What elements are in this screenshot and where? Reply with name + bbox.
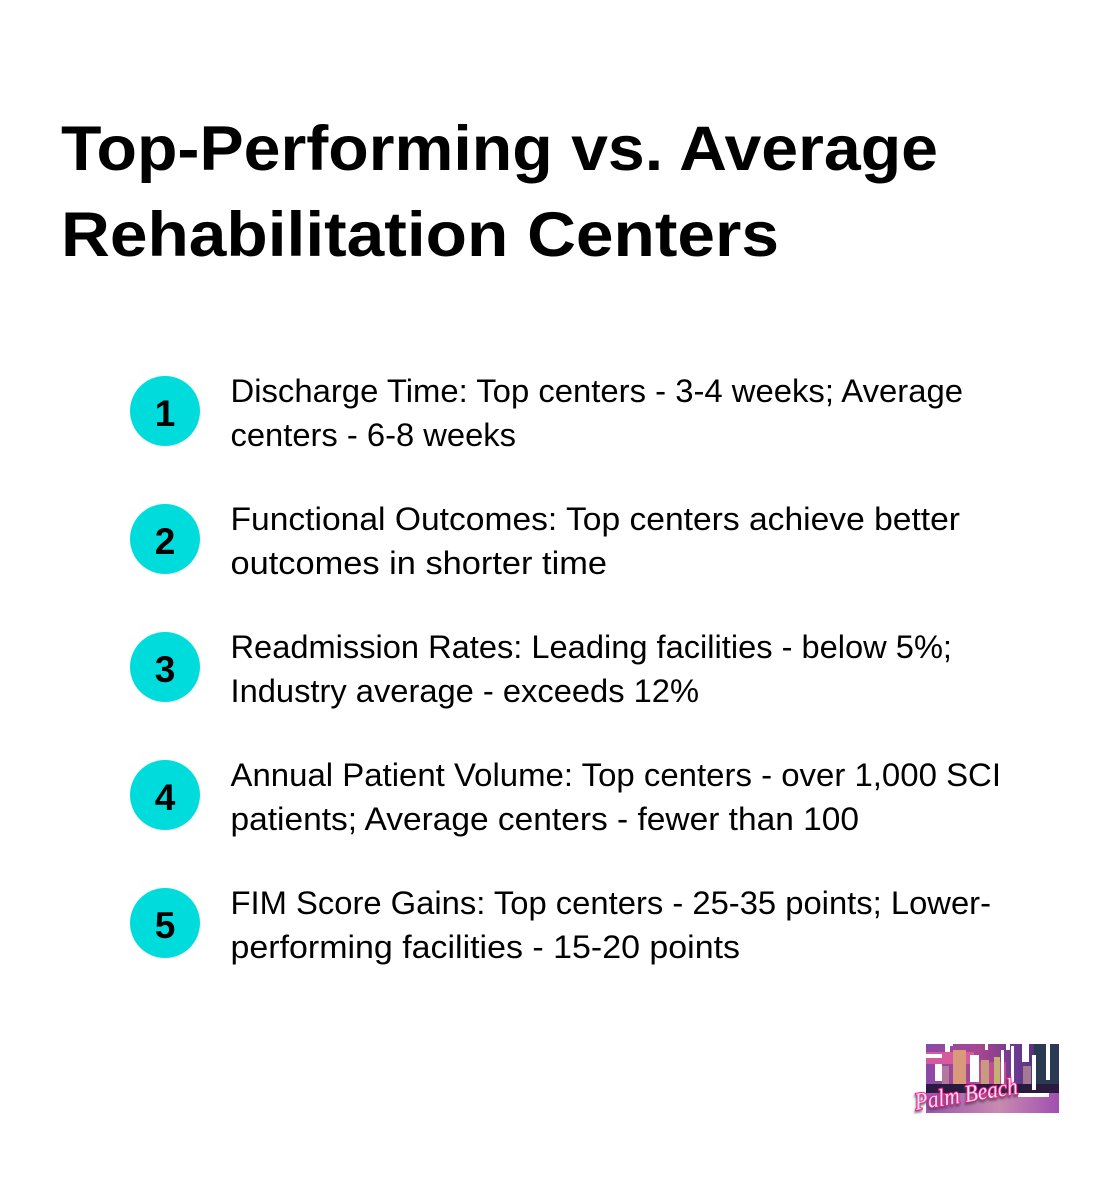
number badge 2: [130, 504, 200, 574]
list item 3: readmission rates: [130, 629, 952, 709]
logo city image: [926, 1044, 1059, 1113]
logo script text: Palm Beach: [912, 1074, 1020, 1116]
item 4 text: patients; Average centers - fewer than 100: [230, 801, 859, 837]
item 2 text: outcomes in shorter time: [230, 545, 607, 581]
item 2 text: Functional Outcomes: Top centers achieve better: [230, 501, 960, 537]
item 5 text: performing facilities - 15-20 points: [230, 929, 740, 965]
logo white letter gaps: [926, 1044, 1050, 1097]
item 1 text: centers - 6-8 weeks: [230, 417, 516, 453]
list item 2: functional outcomes: [130, 501, 960, 581]
number badge 4: [130, 760, 200, 830]
title: [61, 114, 938, 270]
number badge 3: [130, 632, 200, 702]
item 3 text: [230, 629, 952, 709]
item 4 text: [230, 757, 1001, 837]
number badge 3: 3: [155, 649, 175, 690]
list item 5: FIM score gains: [130, 885, 991, 965]
number badge 1: 1: [155, 393, 175, 434]
item 5 text: [230, 885, 991, 965]
item 5 text: FIM Score Gains: Top centers - 25-35 points; Lower-: [230, 885, 991, 921]
list item 4: annual patient volume: [130, 757, 1001, 837]
title: Rehabilitation Centers: [61, 200, 779, 270]
number badge 5: [130, 888, 200, 958]
item 4 text: Annual Patient Volume: Top centers - over 1,000 SCI: [230, 757, 1001, 793]
logo: amitay Palm Beach: [912, 1044, 1059, 1116]
item 1 text: Discharge Time: Top centers - 3-4 weeks; Average: [230, 373, 963, 409]
item 1 text: [230, 373, 963, 453]
title: Top-Performing vs. Average: [61, 114, 938, 184]
number badge 5: 5: [155, 905, 175, 946]
number badge 4: 4: [155, 777, 176, 818]
item 3 text: Industry average - exceeds 12%: [230, 673, 699, 709]
item 3 text: Readmission Rates: Leading facilities - below 5%;: [230, 629, 952, 665]
list item 1: discharge time: [130, 373, 963, 453]
number badge 1: [130, 376, 200, 446]
number badge 2: 2: [155, 521, 175, 562]
item 2 text: [230, 501, 960, 581]
